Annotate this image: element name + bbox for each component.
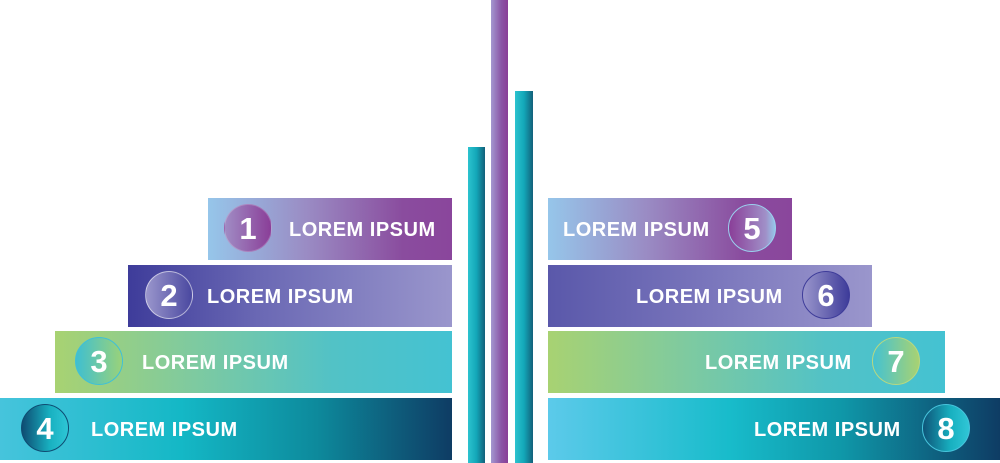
icon: number 7: 7 <box>887 344 905 379</box>
text: item 7 label: LOREM IPSUM <box>705 352 852 374</box>
icon: number 2: 2 <box>160 278 178 313</box>
text: item 2 label: LOREM IPSUM <box>207 286 354 308</box>
icon: number 2 <box>145 271 193 319</box>
icon: number 7 <box>872 337 920 385</box>
vertical bar: center purple <box>491 0 508 463</box>
text: item 4 label: LOREM IPSUM <box>91 419 238 441</box>
panel: item 4 <box>0 398 452 460</box>
icon: number 5: 5 <box>743 211 761 246</box>
icon: number 8 <box>922 404 970 452</box>
vertical bar: left teal <box>468 147 485 463</box>
text: item 1 label: LOREM IPSUM <box>289 219 436 241</box>
icon: number 4 <box>21 404 69 452</box>
vertical bar: right teal <box>515 91 533 463</box>
icon: number 8: 8 <box>937 411 955 446</box>
icon: number 6 <box>802 271 850 319</box>
text: item 6 label: LOREM IPSUM <box>636 286 783 308</box>
text: item 8 label: LOREM IPSUM <box>754 419 901 441</box>
icon: number 1: 1 <box>239 211 257 246</box>
panel: item 7 <box>548 331 945 393</box>
icon: number 3: 3 <box>90 344 108 379</box>
icon: number 5 <box>728 204 776 252</box>
text: item 5 label: LOREM IPSUM <box>563 219 710 241</box>
panel: item 5 <box>548 198 792 260</box>
icon: number 1 <box>224 204 272 252</box>
text: item 3 label: LOREM IPSUM <box>142 352 289 374</box>
icon: number 3 <box>75 337 123 385</box>
icon: number 6: 6 <box>817 278 835 313</box>
panel: item 2 <box>128 265 452 327</box>
panel: item 8 <box>548 398 1000 460</box>
panel: item 6 <box>548 265 872 327</box>
icon: number 4: 4 <box>36 411 54 446</box>
panel: item 3 <box>55 331 452 393</box>
panel: item 1 <box>208 198 452 260</box>
